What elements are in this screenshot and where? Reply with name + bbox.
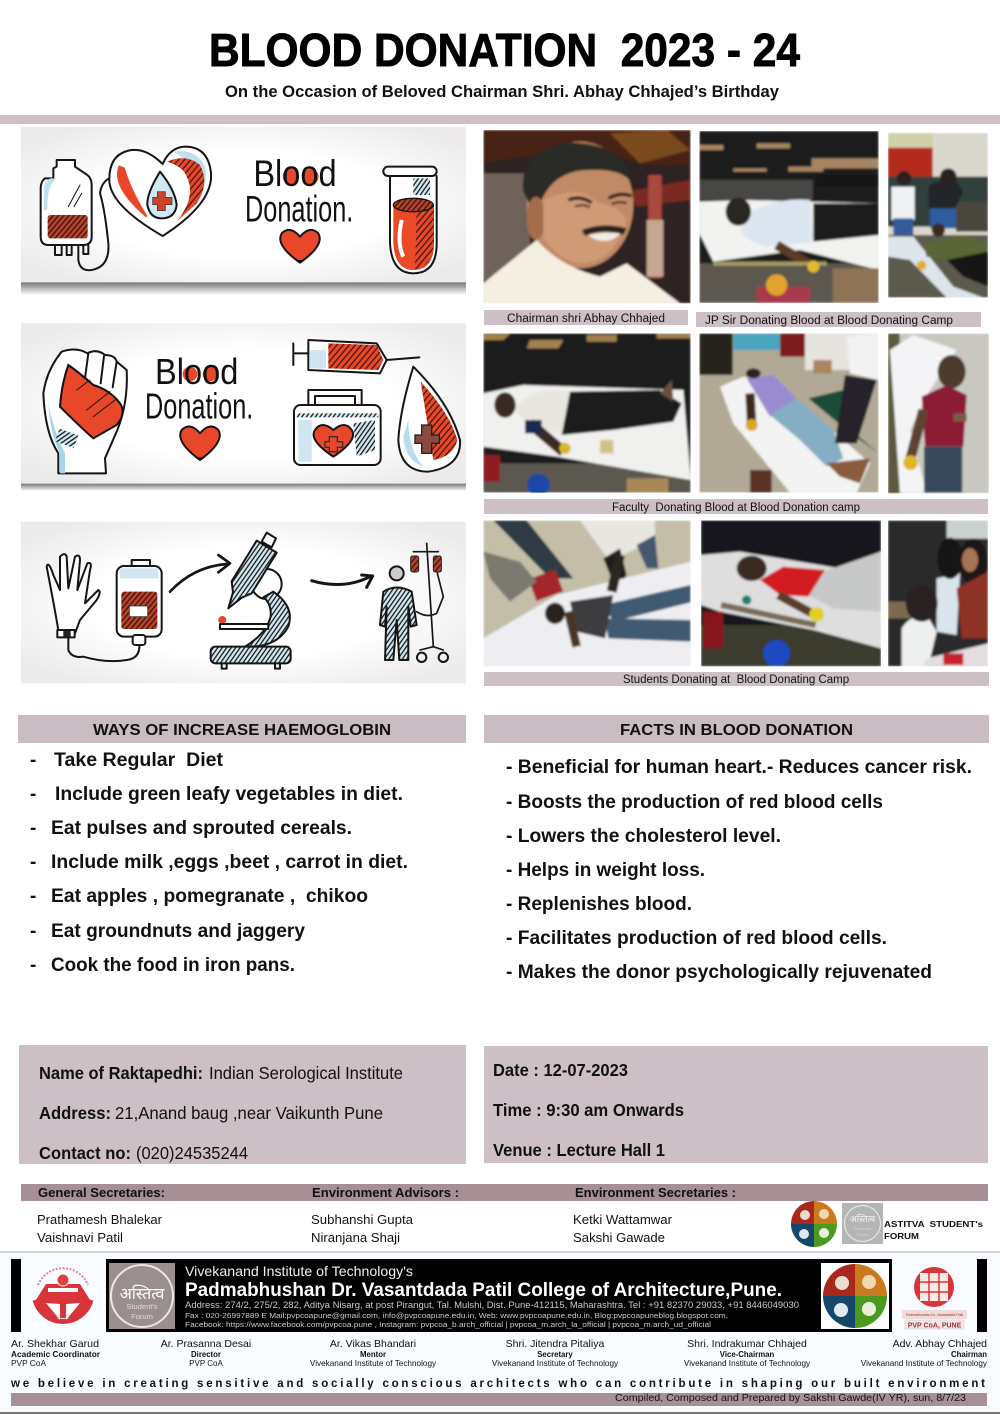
leader: Shekhar Garud: Academic Coordinator xyxy=(11,1350,100,1359)
credit band xyxy=(11,1392,987,1406)
team names xyxy=(37,1212,673,1245)
team band headings: General Secretaries: xyxy=(38,1186,165,1200)
leader: Abhay Chhajed: Chairman xyxy=(951,1350,987,1359)
logo: Astitva student's forum xyxy=(109,1263,175,1329)
team names: Subhanshi Gupta xyxy=(311,1212,414,1227)
leader: Abhay Chhajed xyxy=(861,1338,988,1368)
text block: haemoglobin list: Eat pulses and sprouted cereals. xyxy=(51,818,352,839)
leader: Vikas Bhandari xyxy=(310,1338,437,1368)
heading: ways of increase haemoglobin: WAYS OF INCREASE HAEMOGLOBIN xyxy=(93,722,391,739)
black bar right xyxy=(977,1259,987,1332)
panel: blood bank details: 21,Anand baug ,near Vaikunth Pune xyxy=(115,1103,383,1123)
leader: Shekhar Garud xyxy=(11,1338,100,1368)
illustration panel: fist, syringe, first-aid kit, drop xyxy=(21,323,466,491)
text block: facts list: - Lowers the cholesterol level. xyxy=(506,826,781,847)
leader: Vikas Bhandari: Vivekanand Institute of Technology xyxy=(310,1359,437,1368)
caption: chairman xyxy=(484,310,688,325)
leader: Abhay Chhajed: Adv. Abhay Chhajed xyxy=(893,1338,987,1350)
caption: faculty xyxy=(484,499,988,514)
panel: date time venue: Date : 12-07-2023 xyxy=(493,1060,628,1080)
panel: blood bank details: Contact no: xyxy=(39,1143,131,1163)
credit band: Compiled, Composed and Prepared by Sakshi Gawde(IV YR), sun, 8/7/23 xyxy=(615,1392,966,1404)
college name text: Padmabhushan Dr. Vasantdada Patil College of Architecture,Pune. xyxy=(185,1279,782,1301)
caption: students xyxy=(484,672,989,686)
photo: faculty donor with jeans xyxy=(699,333,879,493)
team band headings: Environment Advisors : xyxy=(312,1186,459,1200)
college name text: Facebook: https://www.facebook.com/pvpcoa.pune , Instagram: pvpcoa_b.arch_official | pvpcoa_m.arch_la_official | pvpcoa_m.arch_ud_official xyxy=(185,1320,711,1329)
icon: coloured forum emblem small xyxy=(791,1201,837,1247)
college name text: Fax : 020-26997889 E Mail:pvpcoapune@gmail.com, info@pvpcoapune.edu.in, Web: www.pvpcoapune.edu.in, Blog:pvpcoapuneblog.blogspot.com, xyxy=(185,1311,728,1320)
photo: student donor in red top xyxy=(701,520,881,667)
college name text: Address: 274/2, 275/2, 282, Aditya Nisarg, at post Pirangut, Tal. Mulshi, Dist. Pune-412115, Maharashtra. Tel : +91 82370 29033, +91 8446049030 xyxy=(185,1300,799,1310)
black bar left xyxy=(11,1259,21,1332)
leader: Vikas Bhandari: Mentor xyxy=(360,1350,386,1359)
text block: facts list: - Facilitates production of red blood cells. xyxy=(506,928,887,949)
caption: JP Sir: JP Sir Donating Blood at Blood Donating Camp xyxy=(705,315,953,327)
text block: haemoglobin list: - xyxy=(30,852,36,873)
leader: Indrakumar Chhajed: Shri. Indrakumar Chhajed xyxy=(687,1338,807,1350)
black college banner xyxy=(106,1259,892,1332)
text block: haemoglobin list: Include milk ,eggs ,beet , carrot in diet. xyxy=(51,852,408,873)
icon: Astitva logo small: Forum xyxy=(857,1232,869,1237)
text block: facts list: - Boosts the production of red blood cells xyxy=(506,792,883,813)
logo: Astitva student's forum: Student's xyxy=(126,1302,158,1311)
photo: Chairman Abhay Chhajed xyxy=(483,130,691,303)
leader: Jitendra Pitaliya: Secretary xyxy=(537,1350,573,1359)
logo: PVP CoA Pune: PVP CoA, PUNE xyxy=(908,1322,962,1330)
icon: Astitva logo small: Student's xyxy=(854,1226,871,1231)
leader: Prasanna Desai: PVP CoA xyxy=(189,1359,223,1368)
panel: blood bank details: (020)24535244 xyxy=(136,1143,248,1163)
text block: haemoglobin list: Include green leafy vegetables in diet. xyxy=(55,784,403,805)
text block: haemoglobin list xyxy=(30,750,408,976)
illustration panel: fist, syringe, first-aid kit, drop: Donation. xyxy=(145,385,253,426)
text block: facts list: - Replenishes blood. xyxy=(506,894,692,915)
text block: haemoglobin list: - xyxy=(30,886,36,907)
text block: haemoglobin list: Take Regular Diet xyxy=(54,750,224,771)
text block: haemoglobin list: - xyxy=(30,955,36,976)
caption: JP Sir xyxy=(696,312,981,327)
team names: Ketki Wattamwar xyxy=(573,1212,673,1227)
heading: facts in blood donation xyxy=(484,715,989,743)
photo: student donor on bed with helper xyxy=(483,520,691,666)
leader: Indrakumar Chhajed: Vivekanand Institute of Technology xyxy=(684,1359,811,1368)
text block: facts list xyxy=(506,757,972,983)
team names: Niranjana Shaji xyxy=(311,1230,400,1245)
leader: Prasanna Desai: Director xyxy=(191,1350,221,1359)
forum label xyxy=(884,1219,983,1241)
text block: facts list: - Makes the donor psychologically rejuvenated xyxy=(506,962,932,983)
logo: Vivekanand Institute emblem xyxy=(35,1268,91,1321)
tagline: we believe in creating sensitive and socially conscious architects who can contribute in shaping our built environment xyxy=(10,1378,985,1390)
text block: haemoglobin list: - xyxy=(30,818,36,839)
text block: haemoglobin list: - xyxy=(30,921,36,942)
panel: blood bank details: Address: xyxy=(39,1103,111,1123)
leader: Jitendra Pitaliya xyxy=(492,1338,619,1368)
panel: blood bank details xyxy=(19,1045,466,1164)
college name text: Vivekanand Institute of Technology's xyxy=(185,1263,413,1279)
panel: date time venue: Time : 9:30 am Onwards xyxy=(493,1100,684,1120)
leader: Shekhar Garud: Ar. Shekhar Garud xyxy=(11,1338,99,1350)
illustration panel: hand, bag, microscope, patient xyxy=(21,522,466,683)
heading: ways of increase haemoglobin xyxy=(18,715,466,743)
text block: facts list: - Helps in weight loss. xyxy=(506,860,705,881)
photo: JP Sir donating blood xyxy=(699,131,879,303)
caption: chairman: Chairman shri Abhay Chhajed xyxy=(507,313,665,325)
logo: coloured forum emblem large xyxy=(821,1263,889,1329)
team band headings xyxy=(21,1184,988,1201)
text block: haemoglobin list: Eat apples , pomegranate , chikoo xyxy=(51,886,368,907)
forum label: FORUM xyxy=(884,1231,919,1241)
photo: students standing beside donor xyxy=(888,133,988,298)
leader: Indrakumar Chhajed: Vice-Chairman xyxy=(720,1350,774,1359)
team names: Sakshi Gawade xyxy=(573,1230,665,1245)
panel: blood bank details: Indian Serological Institute xyxy=(209,1063,403,1083)
footer background xyxy=(0,1251,1000,1414)
text block: haemoglobin list: Cook the food in iron pans. xyxy=(51,955,295,976)
team band headings: Environment Secretaries : xyxy=(575,1186,736,1200)
illustration panel: blood bag, heart, test tube: Donation. xyxy=(245,188,353,230)
leader: Shekhar Garud: PVP CoA xyxy=(11,1359,47,1368)
leader: Abhay Chhajed: Vivekanand Institute of Technology xyxy=(861,1359,988,1368)
text block: facts list: - Beneficial for human heart.- Reduces cancer risk. xyxy=(506,757,972,778)
logo: PVP CoA Pune xyxy=(902,1267,967,1330)
caption: faculty: Faculty Donating Blood at Blood Donation camp xyxy=(612,502,860,514)
leader: Indrakumar Chhajed xyxy=(684,1338,811,1368)
subtitle: On the Occasion of Beloved Chairman Shri. Abhay Chhajed’s Birthday xyxy=(225,82,780,101)
text block: haemoglobin list: - xyxy=(30,750,36,771)
header band xyxy=(0,115,1000,124)
panel: date time venue xyxy=(484,1046,988,1163)
text block: haemoglobin list: Eat groundnuts and jaggery xyxy=(51,921,305,942)
photo: faculty donor on bed xyxy=(483,333,691,496)
title: BLOOD DONATION 2023 - 24 xyxy=(209,24,800,76)
logo: Astitva student's forum: Forum xyxy=(131,1312,153,1321)
logo: PVP CoA Pune: Padmabhushan Dr. Vasantdada Patil xyxy=(906,1313,963,1317)
panel: date time venue: Venue : Lecture Hall 1 xyxy=(493,1140,665,1160)
forum label: ASTITVA STUDENT's xyxy=(884,1219,983,1229)
caption: students: Students Donating at Blood Donating Camp xyxy=(623,674,849,686)
illustration panel: blood bag, heart, test tube xyxy=(21,127,466,295)
photo: students attending donor xyxy=(888,520,988,666)
team names: Vaishnavi Patil xyxy=(37,1230,123,1245)
leader: Vikas Bhandari: Ar. Vikas Bhandari xyxy=(330,1338,416,1350)
leader: Jitendra Pitaliya: Shri. Jitendra Pitaliya xyxy=(506,1338,604,1350)
icon: Astitva logo small xyxy=(842,1203,883,1244)
college name text xyxy=(185,1263,799,1329)
leader: Jitendra Pitaliya: Vivekanand Institute of Technology xyxy=(492,1359,619,1368)
heading: facts in blood donation: FACTS IN BLOOD DONATION xyxy=(620,722,853,739)
panel: blood bank details: Name of Raktapedhi: xyxy=(39,1063,203,1083)
illustration panel: blood bag, heart, test tube: Blood xyxy=(253,152,337,194)
leader: Prasanna Desai: Ar. Prasanna Desai xyxy=(161,1338,251,1350)
icon: Astitva logo small: अस्तित्व xyxy=(850,1213,876,1224)
logo: Astitva student's forum: अस्तित्व xyxy=(120,1284,166,1303)
illustration panel: fist, syringe, first-aid kit, drop: Blood xyxy=(155,351,238,392)
text block: haemoglobin list: - xyxy=(30,784,36,805)
leader: Prasanna Desai xyxy=(161,1338,251,1368)
photo: student donor in maroon shirt xyxy=(888,333,989,493)
team names: Prathamesh Bhalekar xyxy=(37,1212,163,1227)
